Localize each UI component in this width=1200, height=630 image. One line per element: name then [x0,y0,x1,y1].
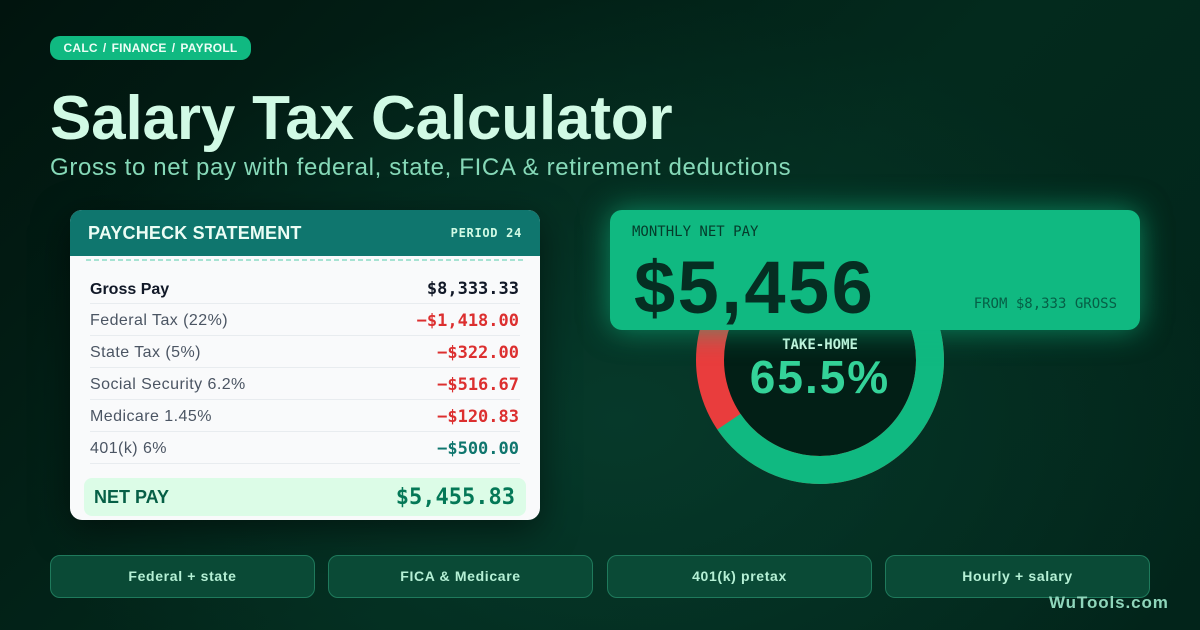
chip: 401(k) pretax: 401(k) pretax [692,568,787,584]
row: 401k: −$500.00 [437,439,519,459]
row: state tax: State Tax (5%) [90,344,201,361]
watermark: WuTools.com [1049,593,1169,612]
chip: fica & medicare [328,555,593,598]
row: state tax: −$322.00 [437,343,519,363]
chip: hourly + salary: Hourly + salary [962,568,1073,584]
green take-home segment [710,250,930,470]
subtitle: Gross to net pay with federal, state, FICA & retirement deductions [50,154,791,181]
chip: federal + state [50,555,315,598]
net pay value: $5,455.83 [396,485,515,510]
chip: hourly + salary [885,555,1150,598]
red deductions segment [710,250,930,470]
row: social security: −$516.67 [437,375,519,395]
row: gross pay [90,272,520,304]
net pay amount: $5,456 [634,246,875,329]
monthly net pay label: MONTHLY NET PAY [632,224,758,240]
row: 401k: 401(k) 6% [90,440,167,457]
chip: fica & medicare: FICA & Medicare [400,568,521,584]
row: federal tax [90,304,520,336]
row: medicare [90,400,520,432]
row: 401k [90,432,520,464]
row: social security: Social Security 6.2% [90,376,246,393]
donut chart [696,330,944,484]
take-home label: TAKE-HOME [782,337,858,353]
tag pill [50,36,251,60]
gross note: FROM $8,333 GROSS [974,296,1117,312]
row: federal tax: −$1,418.00 [417,311,519,331]
row: medicare: −$120.83 [437,407,519,427]
row: gross pay: $8,333.33 [427,279,519,299]
title: Salary Tax Calculator [50,84,672,153]
donut inner disc [723,263,917,457]
net pay band [84,478,526,516]
row: social security [90,368,520,400]
chip: federal + state: Federal + state [128,568,237,584]
panel: paycheck statement [70,210,540,520]
row: state tax [90,336,520,368]
row: federal tax: Federal Tax (22%) [90,312,228,329]
row: medicare: Medicare 1.45% [90,408,212,425]
row: gross pay: Gross Pay [90,281,169,298]
perforated edge [86,259,524,261]
take-home percent: 65.5% [750,351,890,403]
net pay label: NET PAY [94,487,169,507]
panel: monthly net pay [610,210,1140,330]
period label: PERIOD 24 [451,226,522,240]
tag pill: CALC / FINANCE / PAYROLL [63,41,238,55]
statement title: PAYCHECK STATEMENT [88,223,302,243]
chip: 401(k) pretax [607,555,872,598]
statement header [70,210,540,256]
